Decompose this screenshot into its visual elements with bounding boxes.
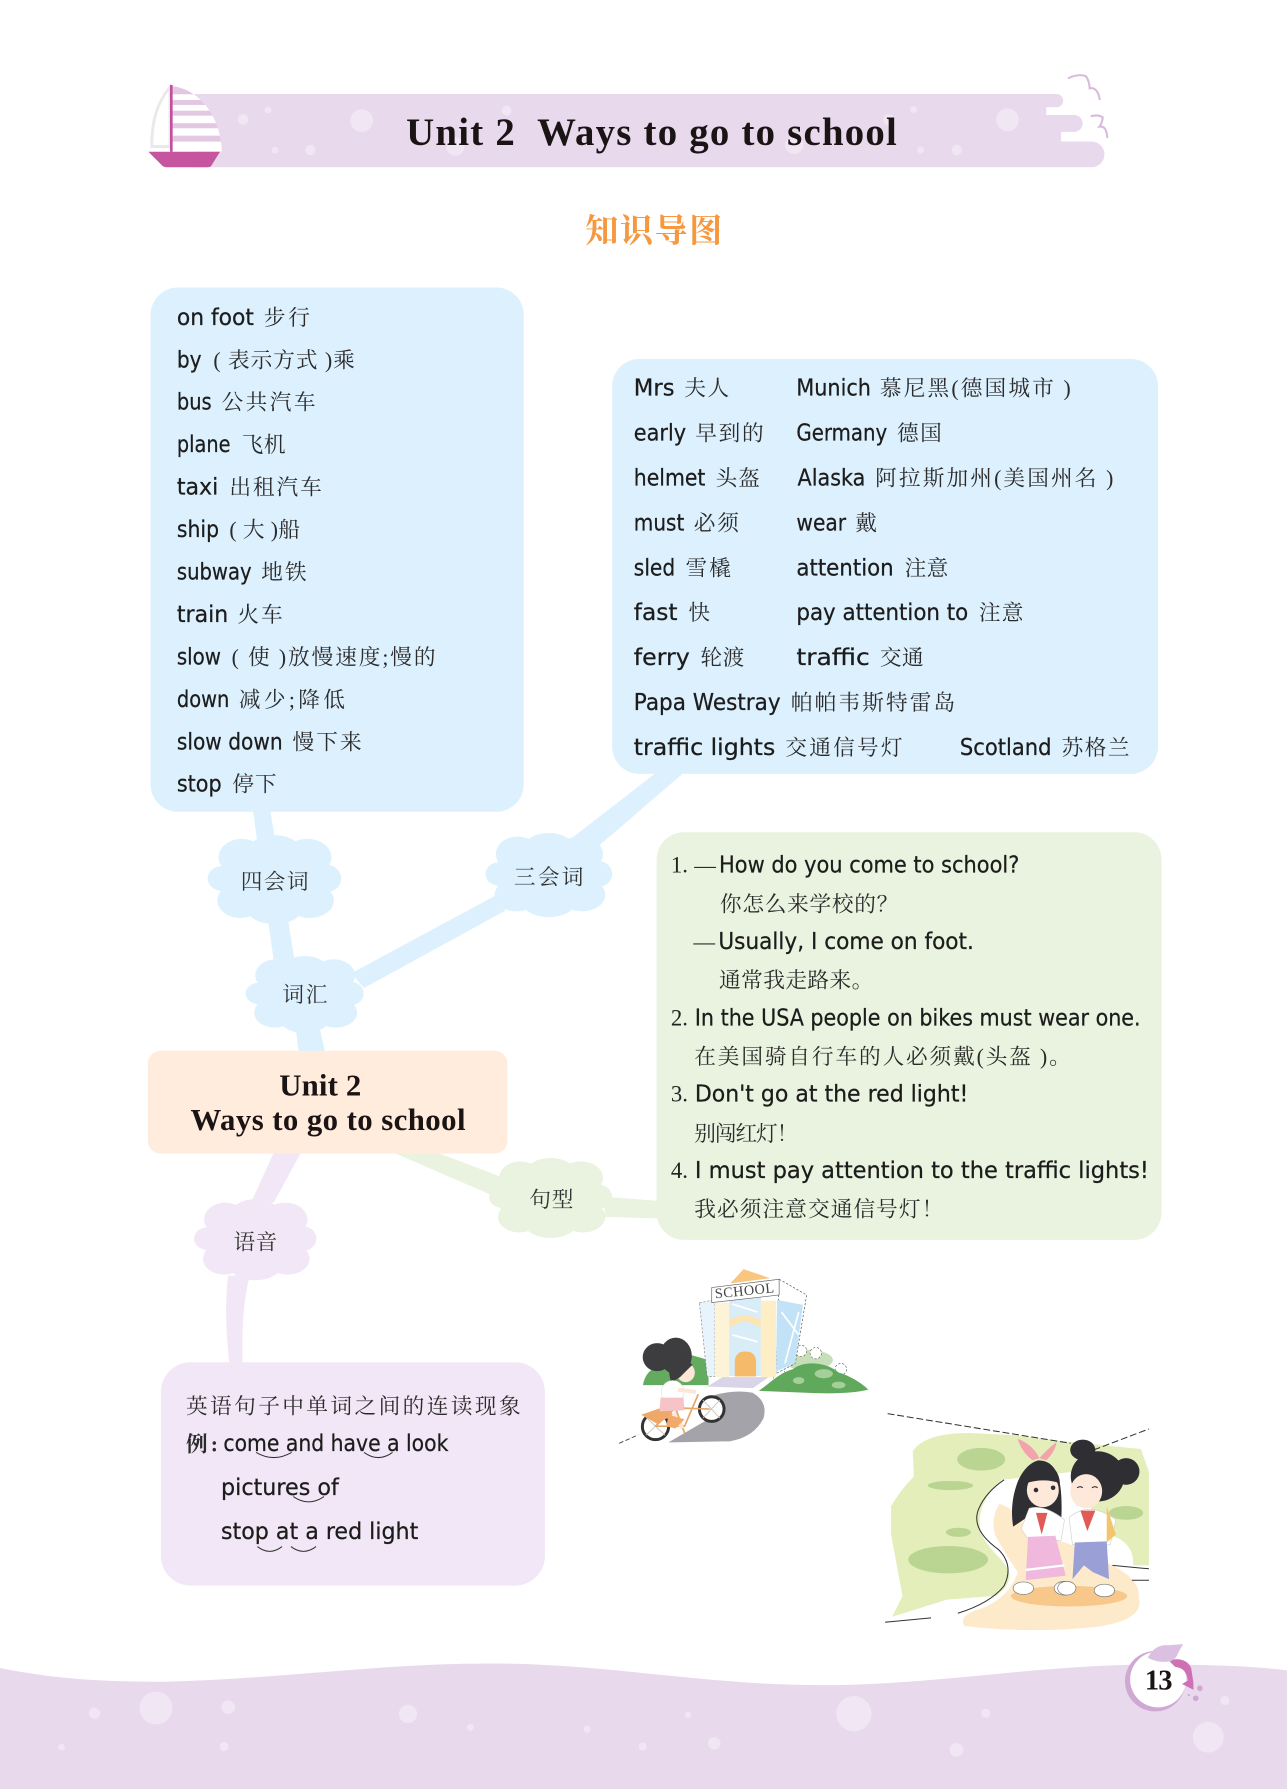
vocabulary list two columns: 苏格兰 (1062, 736, 1130, 760)
ground patches (963, 1504, 1139, 1630)
sentence list: 2. (671, 1005, 688, 1030)
phonics text: 英语句子中单词之间的连读现象 (186, 1394, 521, 1418)
vocabulary list two columns: wear (796, 510, 847, 536)
vocabulary list two columns: sled (634, 555, 675, 581)
vocabulary list two columns: traffic (796, 645, 870, 671)
vocabulary list two columns: Alaska (798, 465, 865, 491)
vocabulary list two columns: 雪橇 (685, 556, 731, 580)
vocabulary list: 地铁 (261, 560, 307, 584)
vocabulary list two columns: 快 (688, 601, 710, 625)
illustration: girl cycling to school (619, 1269, 868, 1443)
topic title: Ways to go to school (191, 1103, 466, 1137)
vocabulary list two columns: 交通 (880, 646, 924, 670)
cloud: three-skill words: 三会词 (514, 866, 583, 890)
vocabulary list: 慢下来 (293, 730, 362, 754)
vocabulary list two columns: early (634, 420, 686, 446)
panel: three-skill vocabulary (612, 359, 1158, 774)
vocabulary list two columns: 慕尼黑(德国城市 ) (880, 377, 1071, 401)
vocabulary list: ship (177, 517, 219, 543)
vocabulary list two columns: 注意 (905, 556, 949, 580)
girl with hair buns (1058, 1440, 1139, 1597)
cloud: four-skill words: 四会词 (241, 870, 309, 894)
vocabulary list two columns: Scotland (960, 735, 1052, 761)
path (956, 1472, 1149, 1632)
vocabulary list: bus (177, 390, 212, 416)
vocabulary list two columns: helmet (634, 465, 706, 491)
page number badge (1125, 1644, 1203, 1711)
vocabulary list: 减少;降低 (239, 688, 345, 712)
vocabulary list: train (177, 602, 228, 628)
vocabulary list two columns: ferry (634, 645, 690, 671)
vocabulary list two columns: 早到的 (695, 421, 764, 445)
vocabulary list two columns: pay attention to (796, 600, 968, 626)
sentence list: 通常我走路来。 (719, 968, 873, 992)
girl on bicycle (641, 1338, 724, 1440)
icon: seagulls (1068, 75, 1107, 138)
connector lines: vocabulary (252, 770, 687, 1053)
vocabulary list: on foot (177, 305, 254, 331)
vocabulary list two columns: 交通信号灯 (785, 736, 902, 760)
vocabulary list two columns: 德国 (897, 421, 942, 445)
sentence list: 别闯红灯！ (694, 1122, 798, 1146)
topic title (191, 1069, 466, 1137)
header banner (148, 75, 1107, 167)
panel: phonics (161, 1362, 545, 1586)
vocabulary list: 停下 (232, 773, 277, 797)
title: Unit 2 Ways to go to school (406, 111, 897, 154)
vocabulary list two columns: Mrs (634, 376, 675, 402)
vocabulary list two columns: 戴 (855, 511, 877, 535)
left bush (643, 1353, 709, 1385)
sentence list: 你怎么来学校的？ (720, 893, 898, 917)
sentence list: 3. (671, 1081, 688, 1106)
sentence list: 在美国骑自行车的人必须戴(头盔 )。 (694, 1045, 1071, 1069)
illustration: two children walking (885, 1414, 1149, 1632)
school building (699, 1269, 807, 1388)
topic title: Unit 2 (279, 1069, 361, 1103)
vocabulary list: ( 表示方式 )乘 (213, 348, 355, 372)
phonics text: 例: (186, 1432, 218, 1456)
school sign: SCHOOL (714, 1280, 775, 1302)
sentence list: Usually, I come on foot. (718, 929, 974, 955)
vocabulary list: ( 大 )船 (229, 518, 300, 542)
sentence list: 1. (671, 853, 688, 878)
right bush (759, 1345, 868, 1393)
vocabulary list: stop (177, 772, 222, 798)
cloud: sentence patterns (489, 1158, 612, 1238)
page number: 13 (1145, 1666, 1173, 1697)
cloud: three-skill words (485, 833, 612, 917)
phonics text (186, 1394, 521, 1545)
sentence list: In the USA people on bikes must wear one. (695, 1005, 1141, 1031)
banner ribbon (194, 94, 1104, 167)
sentence list: How do you come to school? (719, 853, 1019, 879)
vocabulary list: 火车 (237, 603, 283, 627)
liaison arcs (256, 1452, 392, 1551)
vocabulary list two columns: fast (634, 600, 678, 626)
banner bubbles (238, 106, 1019, 156)
sentence list: Don't go at the red light! (695, 1081, 968, 1107)
phonics text: come and have a look (223, 1431, 449, 1457)
dashed ground (619, 1435, 638, 1443)
vocabulary list two columns: Germany (796, 420, 887, 446)
icon: dolphin (1148, 1644, 1203, 1701)
vocabulary list: by (177, 347, 202, 373)
panel: sentence patterns (657, 832, 1161, 1240)
sentence list: 我必须注意交通信号灯！ (694, 1197, 943, 1221)
sentence list: I must pay attention to the traffic lights! (695, 1158, 1149, 1184)
cloud: four-skill words (208, 835, 341, 924)
phonics text: pictures of (221, 1475, 340, 1501)
wave bubbles (58, 1691, 1229, 1757)
vocabulary list: 飞机 (242, 433, 286, 457)
vocabulary list two columns: 注意 (979, 601, 1024, 625)
vocabulary list two columns: 头盔 (716, 466, 760, 490)
cloud: phonics (194, 1199, 316, 1280)
vocabulary list: 步行 (264, 306, 310, 330)
girl with bunny headband (1012, 1439, 1075, 1595)
vocabulary list two columns: Papa Westray (634, 690, 781, 716)
vocabulary list two columns: Munich (796, 376, 871, 402)
center topic box (148, 1051, 507, 1153)
vocabulary list two columns: traffic lights (634, 735, 775, 761)
icon: sailboat (148, 85, 222, 167)
cloud: phonics: 语音 (234, 1230, 277, 1254)
vocabulary list: 出租汽车 (229, 476, 322, 500)
connector lines: phonics (226, 1150, 302, 1365)
vocabulary list: slow down (177, 729, 283, 755)
section heading: 知识导图 (585, 213, 722, 250)
sentence list: 4. (671, 1158, 688, 1183)
vocabulary list: slow (177, 644, 221, 670)
vocabulary list two columns: 轮渡 (701, 646, 744, 670)
phonics text: stop at a red light (221, 1519, 418, 1545)
bottom wave (0, 1663, 1287, 1789)
vocabulary list: plane (177, 432, 230, 458)
vocabulary list two columns: attention (796, 555, 894, 581)
vocabulary list two columns: must (634, 510, 684, 536)
sentence list: — (693, 854, 716, 878)
vocabulary list two columns: 必须 (694, 511, 739, 535)
cloud: vocabulary: 词汇 (282, 983, 328, 1007)
vocabulary list: ( 使 )放慢速度;慢的 (232, 645, 436, 669)
cloud: sentence patterns: 句型 (529, 1188, 573, 1212)
outline strokes (885, 1414, 1149, 1622)
vocabulary list: down (177, 687, 229, 713)
sentence list (671, 853, 1149, 1221)
cloud: vocabulary (246, 956, 364, 1033)
vocabulary list two columns: 阿拉斯加州(美国州名 ) (875, 466, 1113, 490)
vocabulary list: 公共汽车 (222, 391, 316, 415)
vocabulary list: taxi (177, 475, 218, 501)
panel: four-skill vocabulary (151, 288, 524, 812)
vocabulary list: subway (177, 559, 252, 585)
sentence list: — (692, 930, 715, 954)
vocabulary list (177, 305, 436, 798)
grass (891, 1433, 1149, 1617)
connector lines: sentences (390, 1151, 662, 1219)
vocabulary list two columns: 夫人 (684, 377, 729, 401)
vocabulary list two columns: 帕帕韦斯特雷岛 (791, 691, 955, 715)
grass patches (908, 1448, 1143, 1573)
vocabulary list two columns (634, 376, 1130, 761)
road (665, 1391, 765, 1443)
